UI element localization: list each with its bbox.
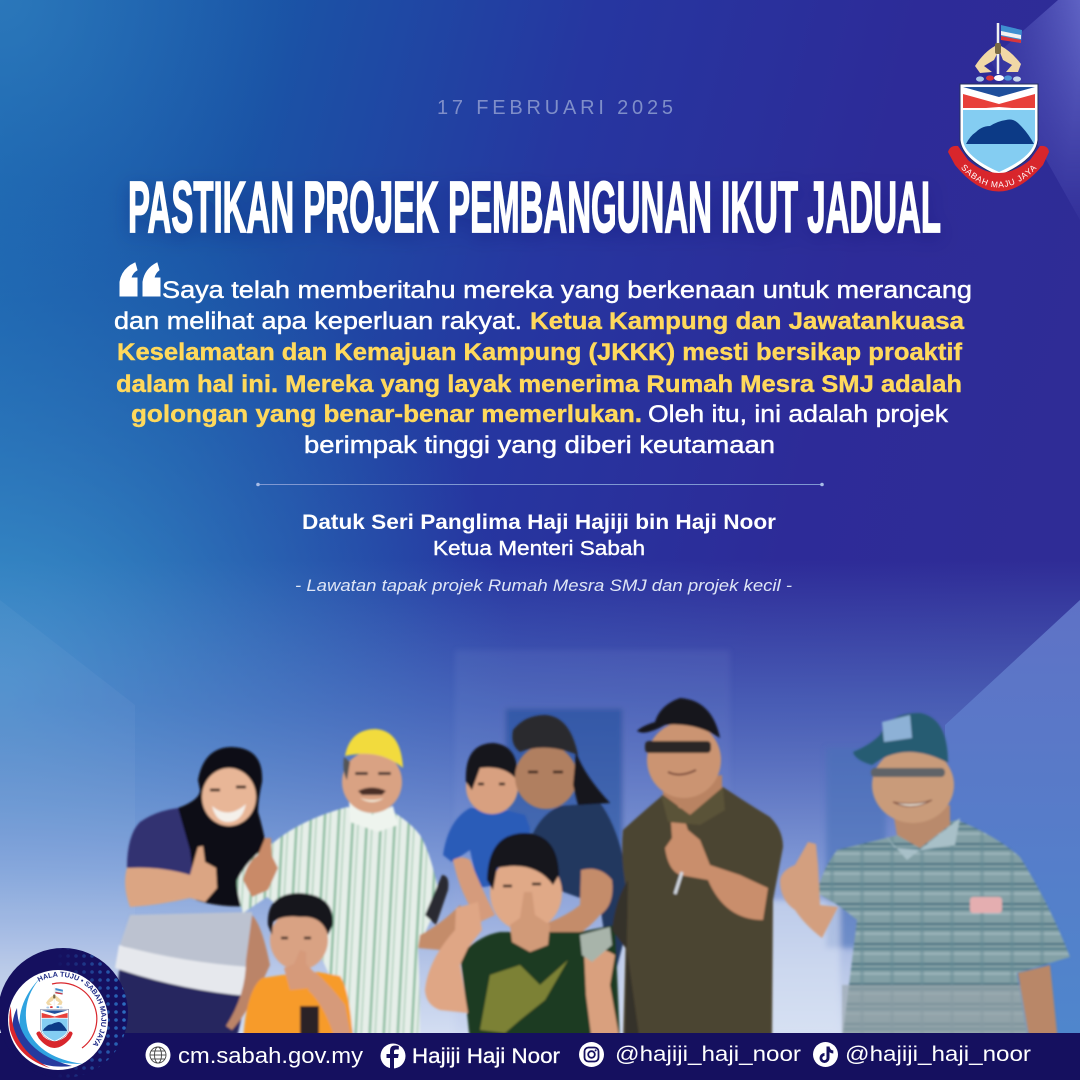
quote text: Saya telah memberitahu mereka yang berkenaan untuk merancang — [162, 277, 972, 304]
quote text — [114, 277, 972, 459]
date: 17 FEBRUARI 2025 — [437, 97, 673, 119]
person: man in yellow cap and striped shirt — [237, 729, 470, 1042]
crest: Sabah coat of arms — [948, 23, 1049, 192]
person: woman in black hijab — [115, 747, 270, 1042]
person: boy in orange shirt — [243, 893, 353, 1042]
quote text: dalam hal ini. Mereka yang layak menerima Rumah Mesra SMJ adalah — [116, 371, 962, 398]
person: toddler in blue shirt — [443, 743, 530, 922]
speaker role: Ketua Menteri Sabah — [433, 538, 645, 560]
photo: group of people giving thumbs up — [115, 698, 1070, 1042]
event caption: - Lawatan tapak projek Rumah Mesra SMJ dan projek kecil - — [295, 577, 793, 595]
instagram link: @hajiji_haji_noor — [615, 1042, 801, 1066]
crest: Sabah coat of arms: SABAH MAJU JAYA — [962, 164, 1037, 188]
quote text: Ketua Kampung dan Jawatankuasa — [530, 308, 965, 335]
divider — [256, 483, 824, 486]
badge: Hala Tuju logo: HALA TUJU • SABAH MAJU JAYA — [37, 972, 106, 1046]
quote text: Keselamatan dan Kemajuan Kampung (JKKK) mesti bersikap proaktif — [117, 339, 963, 366]
quote text: Oleh itu, ini adalah projek — [648, 401, 949, 428]
facebook link: Hajiji Haji Noor — [412, 1045, 560, 1068]
quote text: berimpak tinggi yang diberi keutamaan — [304, 432, 775, 459]
badge: Hala Tuju logo — [0, 948, 128, 1078]
quote text: dan melihat apa keperluan rakyat. — [114, 308, 522, 335]
footer bar — [0, 1033, 1080, 1080]
person: woman with backward cap — [505, 715, 628, 985]
icon: quote mark — [120, 263, 160, 296]
person: elder man in plaid shirt and blue cap — [780, 713, 1070, 1042]
person: boy in green shirt — [425, 833, 620, 1042]
person: man in olive uniform — [612, 698, 783, 1042]
website link: cm.sabah.gov.my — [178, 1043, 364, 1068]
speaker name: Datuk Seri Panglima Haji Hajiji bin Haji Noor — [302, 510, 777, 534]
tiktok link: @hajiji_haji_noor — [845, 1042, 1031, 1066]
quote text: golongan yang benar-benar memerlukan. — [131, 401, 642, 428]
